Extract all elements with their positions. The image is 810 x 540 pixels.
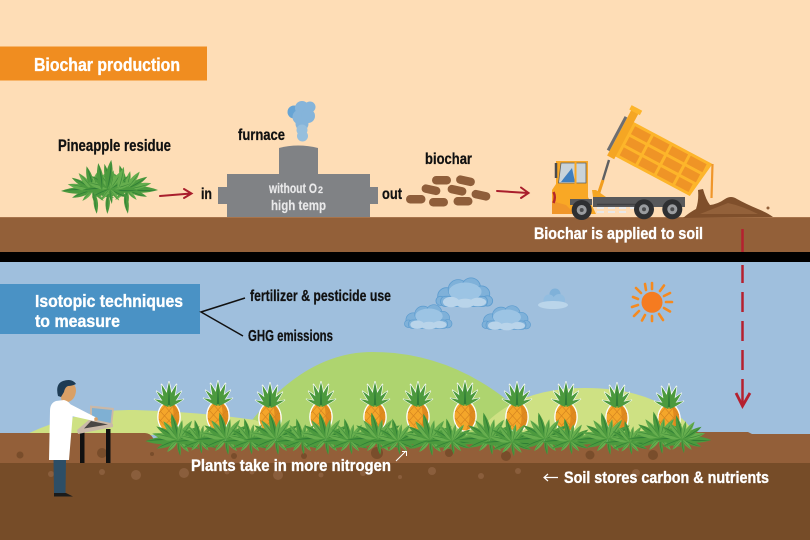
head [60,382,76,403]
dumped biochar pile [683,189,773,218]
hand [94,417,98,421]
panel: biochar production [0,0,810,252]
arm [66,402,96,421]
icon: pineapple residue pile [61,159,158,214]
bracket lines [201,298,245,336]
furnace: 2 [318,185,323,195]
heading: isotopic techniques: Isotopic techniques [35,291,183,311]
label: GHG emissions: GHG emissions [248,328,333,345]
arrow: dashed biochar to soil [736,229,750,406]
label: in: in [201,186,212,203]
arrow: residue to furnace [160,189,192,198]
furnace: high temp [271,197,326,213]
label: plants take in more nitrogen: Plants take in more nitrogen [191,456,391,475]
hair [57,380,76,397]
cab [552,161,596,214]
chassis [592,190,685,212]
table [80,429,110,463]
wheels [572,199,682,220]
label: furnace: furnace [238,127,285,144]
label: biochar: biochar [425,151,472,168]
heading: biochar production: Biochar production [34,54,180,75]
soil [0,432,810,540]
label: out: out [382,186,402,203]
dump bed [604,105,719,201]
pineapple leaves row [145,411,711,456]
tailgate [712,164,713,198]
panel: field and isotopic techniques [0,262,810,540]
pineapples [154,381,684,435]
furnace [218,146,378,217]
scientist with laptop [49,380,114,496]
heading: biochar production [0,46,207,80]
arrow: nitrogen uptake [396,451,406,461]
piston [598,160,609,196]
soil band [0,217,810,252]
icon: biochar chunks [406,175,491,206]
label: pineapple residue: Pineapple residue [58,137,171,155]
icon: sun [632,283,672,321]
label: biochar is applied to soil: Biochar is applied to soil [534,224,703,243]
label: fertilizer and pesticide use: fertilizer & pesticide use [250,288,391,305]
trousers [54,459,66,493]
lab coat [49,400,73,460]
arrow: soil stores [544,474,558,481]
clouds [404,278,568,330]
furnace: without O [268,181,317,196]
divider band [0,252,810,262]
arrow: biochar to truck [497,188,528,198]
label: soil stores carbon and nutrients: Soil stores carbon & nutrients [564,468,769,487]
shoe [54,493,73,496]
smoke [288,101,316,142]
heading: isotopic techniques [0,284,200,334]
heading: isotopic techniques: to measure [35,311,120,331]
hills [27,352,697,436]
laptop [77,406,114,434]
icon: dump truck [552,105,773,220]
